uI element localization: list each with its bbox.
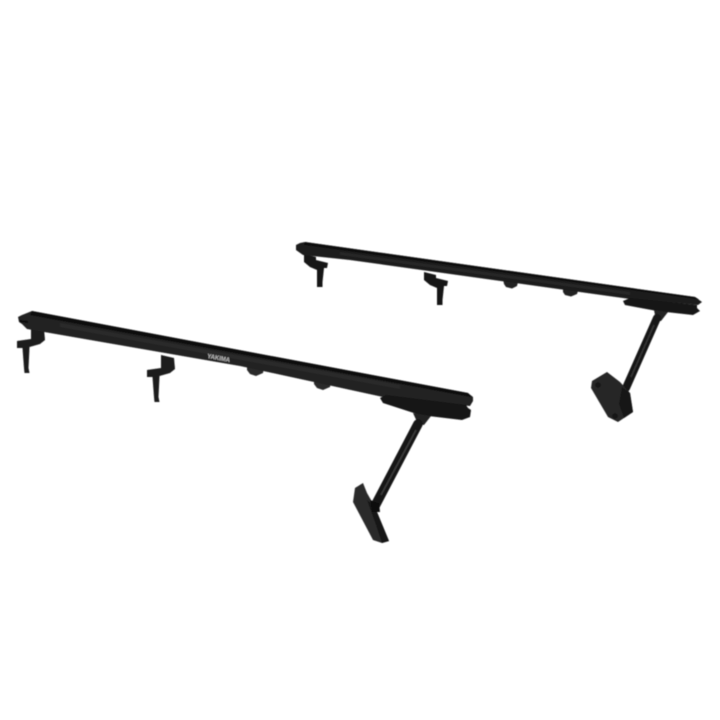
- front rail: face sheen: [60, 323, 400, 389]
- front rail: foot bracket left: [17, 326, 45, 373]
- front rail: rubber pads: [247, 364, 331, 390]
- rear rail: foot bracket right: [424, 272, 448, 305]
- rear rail: bar: [296, 242, 702, 305]
- front rail: foot bracket right: [147, 355, 175, 402]
- front rail: logo: YAKIMA: [207, 353, 231, 364]
- rear rail: rubber pads: [503, 279, 578, 296]
- front rail: clamp hinge: [413, 413, 431, 425]
- rear rail: foot bracket left: [304, 254, 328, 287]
- rear rail: mount block: [591, 372, 633, 422]
- rear rail: mount block shading: [619, 387, 633, 418]
- front rail assembly: [17, 311, 473, 543]
- rear rail: top dark edge: [304, 242, 699, 300]
- front rail: bar: [18, 311, 473, 406]
- rear rail: clamp hinge: [654, 310, 668, 321]
- front rail: mount neck: [370, 500, 380, 512]
- rear rail: end clamp: [623, 298, 700, 315]
- rear rail: face sheen: [340, 252, 630, 295]
- front rail: end slot: [19, 320, 28, 323]
- rear rail: mount bolts: [595, 382, 618, 419]
- front rail: support arm: [375, 424, 418, 506]
- front rail: mount plate: [353, 483, 389, 543]
- front rail: mount plate shading: [367, 500, 389, 543]
- rear rail assembly: [296, 242, 702, 422]
- rear rail: support arm: [626, 318, 657, 388]
- front rail: end clamp: [380, 395, 471, 420]
- front rail: top dark edge: [30, 311, 471, 397]
